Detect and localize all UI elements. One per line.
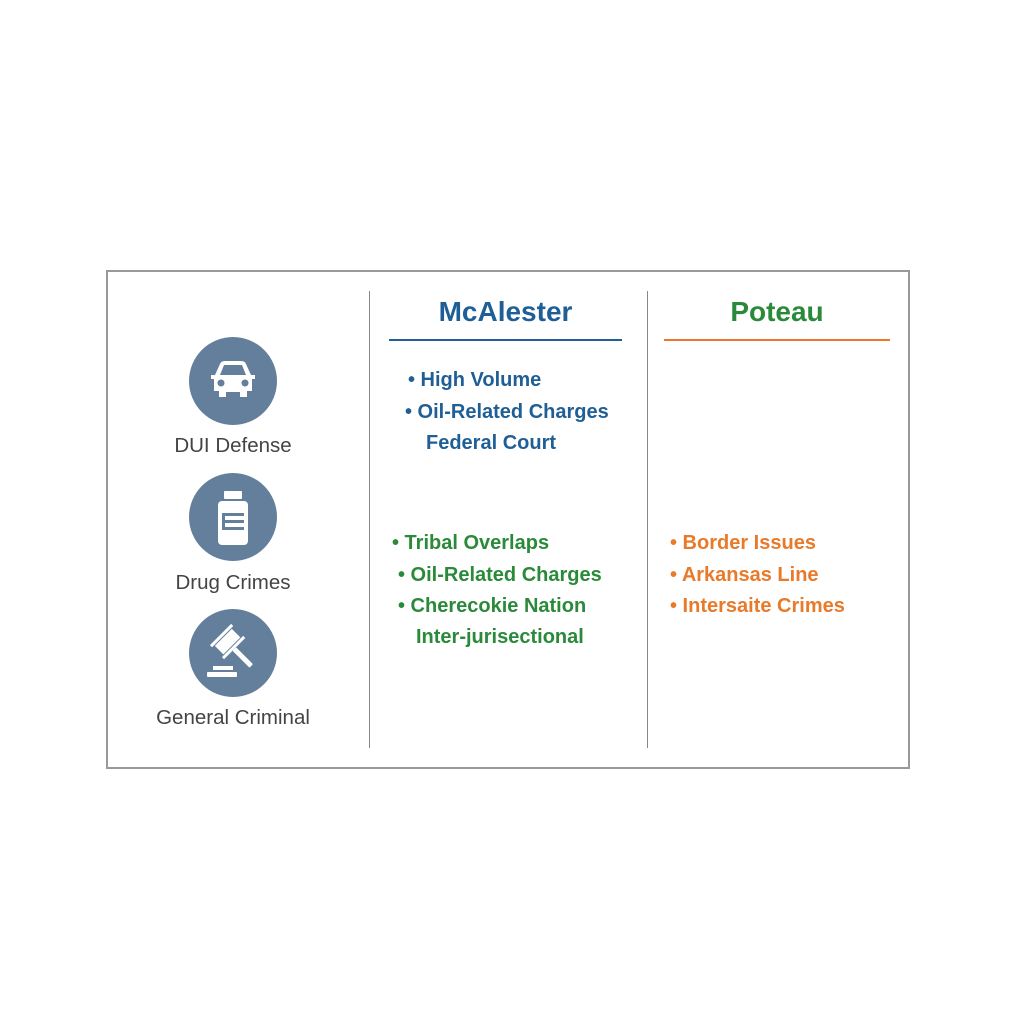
list: McAlester green: • Cherecokie Nation (398, 595, 586, 617)
panel: main frame (106, 270, 910, 769)
list: McAlester green: Inter-jurisectional (416, 626, 584, 648)
list: McAlester blue: • High Volume (408, 369, 541, 391)
label: General Criminal: General Criminal (156, 706, 310, 729)
label: DUI Defense: DUI Defense (174, 434, 292, 457)
list: Poteau orange: • Intersaite Crimes (670, 595, 845, 617)
heading: McAlester: McAlester (439, 296, 572, 327)
list: Poteau orange (670, 532, 845, 617)
list: Poteau orange: • Arkansas Line (670, 564, 819, 586)
list: McAlester blue: Federal Court (426, 432, 556, 454)
list: McAlester blue: • Oil-Related Charges (405, 401, 609, 423)
label: Drug Crimes: Drug Crimes (175, 571, 291, 594)
icon: car (189, 337, 277, 425)
list: Poteau orange: • Border Issues (670, 532, 816, 554)
list: McAlester green: • Oil-Related Charges (398, 564, 602, 586)
list: McAlester green: • Tribal Overlaps (392, 532, 549, 554)
icon: pill bottle (189, 473, 277, 561)
list: McAlester blue (405, 369, 609, 454)
heading: Poteau: Poteau (730, 296, 824, 327)
list: McAlester green (392, 532, 602, 648)
icon: gavel (189, 609, 277, 697)
